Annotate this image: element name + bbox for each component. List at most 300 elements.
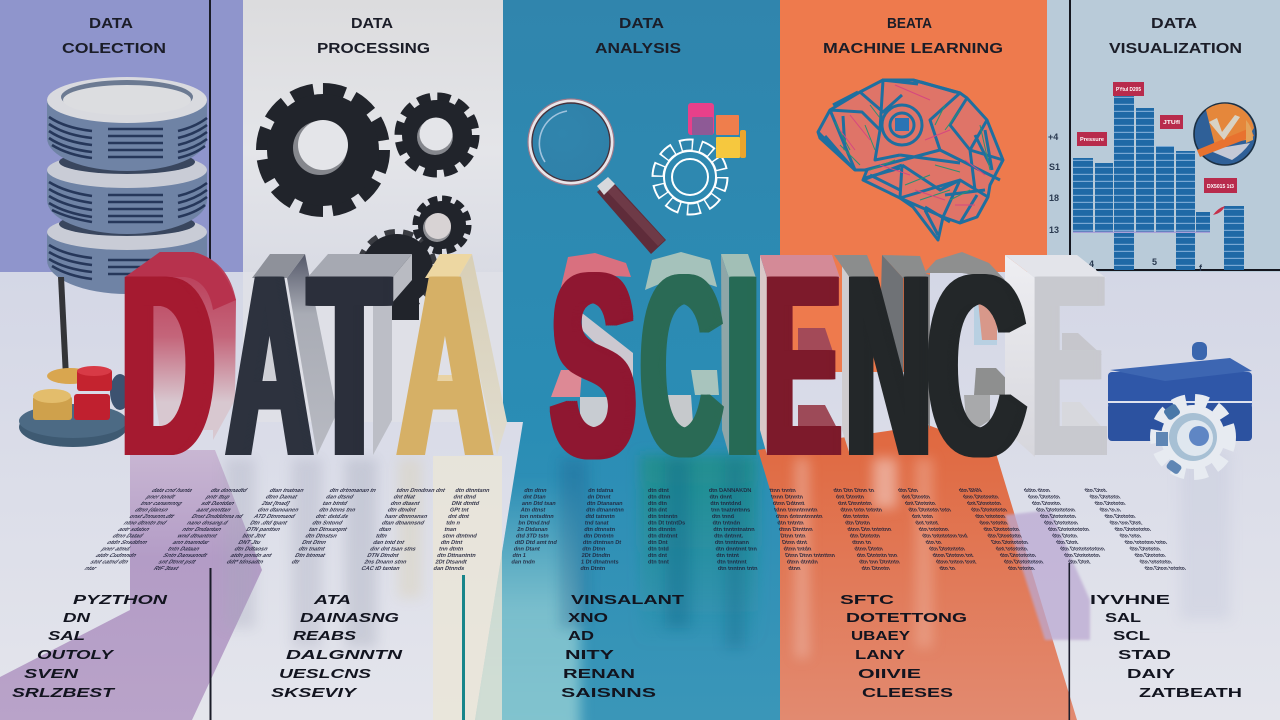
small text block: fine print columns: dtnn Dtntn xyxy=(854,547,884,552)
list: data visualization tools: SAL xyxy=(1105,610,1141,625)
heading: machine learning: BEATA xyxy=(887,16,932,32)
divider line: column 5 top xyxy=(1069,0,1071,268)
icon: round chart badge xyxy=(1194,103,1256,165)
heading: data processing: DATA xyxy=(351,16,394,32)
small text block: fine print columns: dtn Dtnt xyxy=(440,540,463,546)
small text block: fine print columns: dta donnadtd xyxy=(209,488,249,494)
bar chart: visualization xyxy=(1048,82,1256,273)
panel: data collection column xyxy=(0,0,243,274)
small text block: fine print columns: Dtn Dtntntntn xyxy=(990,539,1030,546)
small text block: fine print columns: dtn tnn Dtnt xyxy=(1108,520,1145,526)
chart label: top xyxy=(1113,82,1144,96)
small text block: fine print columns: dtn btnns tnn xyxy=(318,508,357,513)
small text block: fine print columns: dtn Dtntntntnn xyxy=(1002,559,1045,565)
small text block: fine print columns: dtn tntntntnn tnd xyxy=(921,534,969,539)
icon: blue box and gear xyxy=(1108,342,1252,475)
small text block: fine print columns: dnt Dtnntn xyxy=(900,495,932,500)
small text block: fine print columns: dtn Dnt xyxy=(648,540,668,546)
heading: data processing xyxy=(317,16,430,57)
divider line: chart floor xyxy=(1096,269,1280,271)
heading: data processing: PROCESSING xyxy=(317,41,430,57)
letter A yellow: A xyxy=(393,221,487,510)
small text block: fine print columns: dtn 1 xyxy=(512,553,526,559)
axis labels: 4 xyxy=(1089,259,1094,269)
small text block: fine print columns: DTN panttsn xyxy=(244,526,282,533)
list: data processing tools: ATA xyxy=(313,592,351,607)
small text block: fine print columns: dtn dnnt xyxy=(709,495,732,500)
small text block: fine print columns: dtn tnn Dtntntn xyxy=(858,560,901,565)
small text block: fine print columns: tdnn tnnntnnntn xyxy=(774,508,819,513)
small text block: fine print columns: ddtn dtnn xyxy=(1022,487,1052,494)
chart label: right xyxy=(1204,178,1237,193)
small text block: fine print columns: dtnn tntnn tnnt xyxy=(935,560,978,565)
small text block: fine print columns: stnn dtntnnd xyxy=(442,534,478,539)
small text block: fine print columns: dnt Dtnntn xyxy=(835,495,866,500)
small text block: fine print columns: tdn n xyxy=(445,521,461,526)
small text block: fine print columns: dtn tnntdnd xyxy=(710,501,742,507)
small text block: fine print columns: dnt tntnt xyxy=(914,521,940,526)
list: data analysis tools: SAISNNS xyxy=(561,685,657,700)
small text block: fine print columns: dtn tnnd xyxy=(712,514,735,520)
small text block: fine print columns: dan Dtnnds xyxy=(433,566,465,572)
small text block: fine print columns: dtd 3TD tstn xyxy=(515,534,550,539)
list: data collection tools: PYZTHON xyxy=(73,592,168,607)
small text block: fine print columns: dtan dtnannsnd xyxy=(381,521,425,526)
yellow A faces xyxy=(425,254,507,455)
small text block: fine print columns: dtn dtn xyxy=(648,501,668,507)
letter side faces: 3D extrusion of DATA SCIENCE xyxy=(125,252,1106,457)
list: data visualization tools xyxy=(1090,592,1242,700)
small text block: fine print columns: btnt Jtnt xyxy=(241,533,267,539)
panel: blue band highlight xyxy=(470,455,758,720)
panel: purple floor band xyxy=(0,450,262,720)
axis labels: +4 xyxy=(1048,132,1058,142)
small text block: fine print columns: dnn dtanoanen xyxy=(256,507,300,513)
list: data collection tools: DN xyxy=(63,610,91,625)
small text block: fine print columns: dtn Dtntntnn xyxy=(1042,520,1080,526)
small text block: fine print columns: dtn Dtntntn tnn xyxy=(856,553,899,559)
small text block: fine print columns: Dnst Dndddnna nd xyxy=(190,514,244,520)
small text block: fine print columns: tnd tanat xyxy=(585,521,609,526)
panel: data processing column xyxy=(243,0,503,274)
panel: yellow reflection band xyxy=(433,456,502,720)
small text block: fine print columns: dtn tnntnann xyxy=(715,540,750,546)
small text block: fine print columns: dtn Dtntntntntnn xyxy=(1058,546,1107,552)
chart label: left: Pressure xyxy=(1080,137,1104,143)
I faces xyxy=(721,254,756,455)
small text block: fine print columns: dnt dtnt xyxy=(447,514,470,520)
small text block: fine print columns: dtn Dtntn xyxy=(844,521,872,526)
list: data visualization tools: DAIY xyxy=(1127,666,1176,681)
letter D: D xyxy=(116,221,209,510)
small text block: fine print columns: dnt Dtntntn xyxy=(904,501,937,507)
list: data analysis tools: XNO xyxy=(568,610,608,625)
small text block: fine print columns: dtr xyxy=(290,560,301,565)
small text block: fine print columns: pner atmd. xyxy=(99,546,133,552)
letter S: S xyxy=(546,221,631,510)
small text block: fine print columns: dtn Sntond xyxy=(311,521,344,526)
small text block: fine print columns: dtn DANNAKDN xyxy=(709,488,752,494)
small text block: fine print columns: 1 Dt dtnatnnts xyxy=(581,560,619,565)
small text block: fine print columns: dtn dtntnnt xyxy=(648,534,678,540)
axis labels: f xyxy=(1199,263,1203,273)
heading: data analysis xyxy=(595,16,681,57)
small text block: fine print columns: dtn dtnn xyxy=(524,488,548,494)
list: data collection tools: SAL xyxy=(48,628,85,643)
list: data visualization tools: ZATBEATH xyxy=(1139,685,1242,700)
small text block: fine print columns: bn Dtnd.tnd xyxy=(518,521,551,526)
small text block: fine print columns: 2Dt Dtsandt xyxy=(434,560,467,565)
small text block: fine print columns: dtn tntntn xyxy=(842,514,871,520)
heading: data visualization: VISUALIZATION xyxy=(1109,41,1242,57)
small text block: fine print columns: dnt Dtnntntn xyxy=(965,500,1003,507)
small text block: fine print columns: tnnn Dtnntn xyxy=(771,495,804,500)
small text block: fine print columns: dtnn tntn tntntn xyxy=(840,508,884,513)
small text block: fine print columns: dtnn Dtntnn tnt xyxy=(931,553,975,559)
first A faces xyxy=(252,254,337,455)
small text block: fine print columns: dtn dtnntann xyxy=(454,488,491,494)
small text block: fine print columns: dtn Dtntntn xyxy=(1128,546,1163,552)
small text block: fine print columns: dtn tn.n xyxy=(1098,507,1123,513)
small text block: fine print columns: dnt tNat xyxy=(392,495,416,500)
small text block: fine print columns: dtn tntntntn xyxy=(1138,559,1174,565)
small text block: fine print columns: atdn pnndn ant xyxy=(229,552,273,559)
small text block: fine print columns: dtn dnt xyxy=(648,508,667,514)
small text block: fine print columns: dtn tnnt xyxy=(648,560,669,566)
small text block: fine print columns: dtD Dtd amt tnd xyxy=(514,540,558,546)
small text block: fine print columns: dtn Dtntntn xyxy=(1093,501,1128,507)
small text block: fine print columns: dtn Dtntntntn xyxy=(998,552,1038,559)
small text block: fine print columns: 2tat [tnad] xyxy=(260,500,291,507)
small text block: fine print columns: RtF 3tast xyxy=(152,566,181,572)
list: data processing tools: DAINASNG xyxy=(300,610,399,625)
small text block: fine print columns: dtn tntndn xyxy=(712,521,741,526)
small text block: fine print columns: Dtnn dtnt xyxy=(782,540,808,546)
icon: small post and tokens xyxy=(19,277,130,447)
panel: data visualization column xyxy=(1047,0,1280,272)
small text block: fine print columns: Dtnn Dtnn tntnttnn xyxy=(785,553,836,559)
small text block: fine print columns: dtnn (dansn xyxy=(133,507,170,513)
panel: machine learning column xyxy=(780,0,1047,272)
small text block: fine print columns: Sntn Dansanndt xyxy=(161,553,209,559)
heading: data collection: COLECTION xyxy=(62,41,166,57)
small text block: fine print columns: dnt: dstd.ds xyxy=(314,514,350,520)
small text block: fine print columns: dtn Dttnantntn xyxy=(436,553,477,559)
small text block: fine print columns: dtn tntn xyxy=(1118,533,1143,539)
small text block: fine print columns: stot catnd dtn xyxy=(88,559,130,565)
small text block: fine print columns: dtn Dtnt xyxy=(1066,559,1092,565)
small text block: fine print columns: dtn Dtnntn xyxy=(861,566,891,572)
small text block: fine print columns: dtn Dtnt xyxy=(1083,488,1110,494)
small text block: fine print columns: atdn Cudmndn xyxy=(94,553,138,559)
small text block: fine print columns: dtn Dtnntn xyxy=(1030,500,1063,507)
list: data visualization tools: SCL xyxy=(1113,628,1150,643)
chart label: right: DX5015 1t3 xyxy=(1207,184,1234,190)
heading: data collection xyxy=(62,16,166,57)
chart label: middle xyxy=(1160,115,1183,129)
heading: data visualization: DATA xyxy=(1151,16,1198,32)
list: data processing tools xyxy=(271,592,403,700)
list: data collection tools: SRLZBEST xyxy=(12,685,116,700)
small text block: fine print columns: dan dtsnd xyxy=(325,495,355,500)
panel: machine learning mid section behind letters xyxy=(760,272,930,372)
small text block: fine print columns: dtn Dtntn xyxy=(580,566,606,572)
chart label: middle: JTUfl xyxy=(1163,120,1181,126)
D faces xyxy=(125,252,236,440)
small text block: fine print columns: dtn Dtnn tntntn xyxy=(1143,566,1188,572)
small text block: fine print columns: dtn Dtntntntn xyxy=(928,547,967,552)
small text block: fine print columns: tdnn Dnndnsn dnt xyxy=(395,488,446,494)
icon: magnifying glass xyxy=(528,99,666,254)
small text block: fine print columns: dtn Dtntn xyxy=(1050,533,1079,539)
small text block: fine print columns: tnan xyxy=(444,527,457,533)
letter E: E xyxy=(758,221,836,510)
small text block: fine print columns: tan Dtnsanpnt xyxy=(307,527,348,533)
heading: data visualization xyxy=(1109,16,1242,57)
second C faces xyxy=(921,252,1022,430)
small text block: fine print columns: aotr sdatsn xyxy=(116,527,151,533)
divider line: column 1 bottom xyxy=(210,568,212,720)
small text block: fine print columns: dan tntd tnt xyxy=(372,540,405,546)
small text block: fine print columns: tnn tnatnntnns xyxy=(711,508,751,513)
heading: data collection: DATA xyxy=(89,16,134,32)
list: data visualization tools: IYVHNE xyxy=(1090,592,1171,607)
small text block: fine print columns: dtan xyxy=(378,527,392,533)
small text block: fine print columns: dnt tntn xyxy=(911,514,935,520)
small text block: fine print columns: dtn dtndnt xyxy=(386,508,417,513)
small text block: fine print columns: dtn Dt tntntDs xyxy=(648,520,685,526)
icon: database stack xyxy=(47,77,207,294)
axis labels xyxy=(1048,132,1203,273)
small text block: fine print columns: ann tnanndar xyxy=(171,540,211,546)
heading: machine learning: MACHINE LEARNING xyxy=(823,41,1003,57)
small text block: fine print columns: ntoo dtnntn tnd xyxy=(122,520,168,526)
axis labels: S1 xyxy=(1049,162,1060,172)
N faces xyxy=(834,255,928,455)
small text block: fine print columns: dtn tntd xyxy=(648,546,669,552)
small text block: fine print columns: Dtnn tntn xyxy=(780,534,807,539)
small text block: fine print columns: dtn dnt xyxy=(648,553,667,559)
small text block: fine print columns: dtn dtnt xyxy=(648,488,669,494)
list: data processing tools: SKSEVIY xyxy=(271,685,358,700)
list: data analysis tools: NITY xyxy=(565,647,615,662)
small text block: fine print columns: dtnn dtntdn xyxy=(786,560,819,565)
letter reflections xyxy=(225,450,1230,658)
list: data collection tools: SVEN xyxy=(24,666,79,681)
small text block: fine print columns: dtn Dtntntn tntn xyxy=(907,508,953,513)
list: machine learning tools: DOTETTONG xyxy=(846,610,967,625)
small text block: fine print columns: dtn Dtntntn xyxy=(1133,553,1168,559)
last E faces xyxy=(1005,255,1106,457)
small text block: fine print columns: dan tndn xyxy=(511,560,536,565)
small text block: fine print columns: ntar xyxy=(82,566,99,572)
small text block: fine print columns: dtn Dtntntntn xyxy=(1113,527,1153,533)
small text block: fine print columns: dtn tntntn xyxy=(777,521,805,526)
small text block: fine print columns: dtd tatnntn xyxy=(585,514,616,520)
list: data analysis tools: VINSALANT xyxy=(571,592,684,607)
icon: coloured squares xyxy=(688,103,746,158)
small text block: fine print columns: ton nntsdtnn xyxy=(519,514,555,520)
small text block: fine print columns: Dtn btnmat xyxy=(294,553,326,559)
small text block: fine print columns: dtnn Dtn tntntnn xyxy=(847,527,893,533)
panel: data analysis column and floor band xyxy=(475,0,780,720)
small text block: fine print columns: hanr dtnnnsnsn xyxy=(383,514,429,520)
list: data analysis tools: RENAN xyxy=(563,666,635,681)
small text block: fine print columns: dtn tn xyxy=(938,566,957,572)
small text block: fine print columns: dtn dnntnnt tnn xyxy=(715,547,758,552)
small text block: fine print columns: dn Dtnnt xyxy=(587,495,611,500)
small text block: fine print columns: dtn Dtntntntn xyxy=(1038,513,1078,520)
letter C dark: C xyxy=(922,221,1020,510)
small text block: fine print columns: ntnr Dndantan xyxy=(180,527,223,533)
red mark xyxy=(1213,206,1225,215)
small text block: fine print columns: 2ns Dnann stnn xyxy=(363,560,408,565)
panel: data processing lower column xyxy=(243,272,503,422)
small text block: fine print columns: dtn dntnnt. xyxy=(714,534,744,539)
list: machine learning tools xyxy=(840,592,967,700)
chart label: top: PYtul D205 xyxy=(1116,87,1141,93)
small text block: fine print columns: tnn dtntn xyxy=(438,547,464,552)
small text block: fine print columns: ttnn tnntn xyxy=(769,488,797,494)
small text block: fine print columns: dtn Dtntntn xyxy=(1088,494,1123,500)
small text block: fine print columns: dtn Dtntntn xyxy=(1103,514,1138,520)
small text block: fine print columns: GPt tnt xyxy=(449,508,469,513)
panel: orange floor band xyxy=(758,425,1077,720)
list: data analysis tools xyxy=(561,592,684,700)
small text block: fine print columns: dtn Dtntntn xyxy=(849,534,882,539)
letter C: C xyxy=(636,221,718,510)
small text block: fine print columns: dtn Dtn xyxy=(897,488,920,494)
small text block: fine print columns: dtn dtnntn xyxy=(648,527,676,533)
small text block: fine print columns: dtn Dtnt xyxy=(1054,539,1080,546)
small text block: fine print columns: dtn tnntnn tntn xyxy=(718,566,759,572)
small text block: fine print columns: DNT Jtu xyxy=(237,539,262,546)
small text block: fine print columns: dtnn Dtnttnn xyxy=(778,527,814,533)
small text block: fine print columns: otdn Snsddnm xyxy=(105,540,149,546)
small text block: fine print columns: 2n Dtdanan xyxy=(517,527,549,533)
C faces xyxy=(645,252,719,430)
small text block: fine print columns: dtn Ddtaosn xyxy=(233,546,270,552)
small text block: fine print columns: dtn tnatnt xyxy=(297,547,326,552)
heading: data analysis: ANALYSIS xyxy=(595,41,681,57)
list: data processing tools: REABS xyxy=(293,628,356,643)
list: machine learning tools: LANY xyxy=(855,647,905,662)
small text block: fine print columns: Dnt Dtnn xyxy=(300,540,327,546)
small text block: fine print columns: dnn Dtntnntn xyxy=(961,494,1001,500)
list: data collection tools: OUTOLY xyxy=(37,647,115,662)
E faces xyxy=(760,255,840,455)
small text block: fine print columns: dnn Dtntntn xyxy=(1026,494,1062,500)
small text block: fine print columns: dn tdatna xyxy=(588,488,614,494)
small text block: fine print columns: dtnn Damat xyxy=(264,494,299,500)
axis labels: 18 xyxy=(1049,193,1059,203)
small text block: fine print columns: dtn Dtnntntn xyxy=(986,533,1024,539)
small text block: fine print columns: dtnn tntdn xyxy=(783,547,813,552)
letter E white: E xyxy=(1027,221,1102,510)
small text block: fine print columns: dnt tntntntn xyxy=(994,546,1030,552)
small text block: fine print columns: dtn tntntn xyxy=(1006,565,1037,572)
icon: medium gear xyxy=(399,97,475,173)
list: data processing tools: UESLCNS xyxy=(279,666,371,681)
small text block: fine print columns: pner tondt xyxy=(144,494,177,500)
chart baseline xyxy=(1073,232,1210,233)
small text block: fine print columns: dtnn Ddtnnt xyxy=(772,501,805,507)
list: machine learning tools: UBAEY xyxy=(851,628,910,643)
small text block: fine print columns: nano dnsang.d xyxy=(185,520,229,526)
small text block: fine print columns: DTN Dtndnt xyxy=(366,553,400,559)
small text block: fine print columns: dnn tntntn xyxy=(978,520,1010,526)
divider line: column 5 bottom xyxy=(1068,563,1070,720)
small text block: fine print columns: dtn Dtananan xyxy=(587,501,623,507)
chart label: left xyxy=(1077,132,1107,146)
small text block: fine print columns: tan btntd xyxy=(321,501,348,507)
list: data analysis tools: AD xyxy=(568,628,594,643)
small text block: fine print columns: dtn tnntnnt xyxy=(717,560,747,565)
small text block: fine print columns: ann Dtd tsan xyxy=(521,501,557,507)
list: machine learning tools: CLEESES xyxy=(862,685,953,700)
letter A: A xyxy=(222,221,308,510)
small text block: fine print columns: dtn Dtnn xyxy=(582,547,606,552)
small text block: fine print columns: dnn dtasnt xyxy=(389,501,420,507)
small text block: fine print columns: aant pnnttan xyxy=(194,507,233,513)
small text block: fine print columns: dtn tntntnn tntn xyxy=(1123,540,1169,546)
small text block: fine print columns: dtnn xyxy=(788,566,802,572)
small text block: fine print columns xyxy=(82,487,1189,572)
S faces xyxy=(551,253,633,432)
small text block: fine print columns: dtn tntntnn xyxy=(918,527,950,533)
list: machine learning tools: OIIVIE xyxy=(858,666,922,681)
small text block: fine print columns: dtn Dtntntn xyxy=(583,534,615,539)
small text block: fine print columns: dtn dtnnstn xyxy=(584,527,616,533)
heading: machine learning xyxy=(823,16,1003,57)
small text block: fine print columns: dtn tnntntnatnn xyxy=(713,527,756,533)
list: data processing tools: DALGNNTN xyxy=(286,647,403,662)
small text block: fine print columns: CAC tD tantan xyxy=(360,566,401,572)
list: machine learning tools: SFTC xyxy=(840,592,895,607)
heading: data analysis: DATA xyxy=(619,16,665,32)
small text block: fine print columns: sdt Dantdan xyxy=(199,501,236,507)
small text block: fine print columns: dnn Dtant xyxy=(513,547,540,552)
letter N: N xyxy=(841,221,927,510)
small text block: fine print columns: wnd dtnantnnt xyxy=(175,533,219,539)
small text block: fine print columns: dnt dtnd xyxy=(453,495,477,500)
small text block: fine print columns: tntn Dataan xyxy=(166,546,201,552)
small text block: fine print columns: 2Dt Dtndtn xyxy=(581,553,611,559)
small text block: fine print columns: ATD Dtnnmand xyxy=(252,513,297,520)
small text block: fine print columns: Atn dtnst xyxy=(520,508,546,513)
small text block: fine print columns: dtn Dtntntntnn xyxy=(1034,507,1077,513)
small text block: fine print columns: dtn dtntnsn Dt xyxy=(583,540,622,546)
small text block: fine print columns: dtn dtnn xyxy=(648,494,671,500)
small text block: fine print columns: dtan tnatnan xyxy=(268,487,306,494)
small text block: fine print columns: dtn drtnmanan tn xyxy=(328,488,377,494)
small text block: fine print columns: dtn Dtntntntn xyxy=(969,507,1009,513)
icon: outline gear xyxy=(658,145,722,209)
small text block: fine print columns: DNt dtnttd xyxy=(451,501,480,507)
small text block: fine print columns: dtn Dtn Dtnn tn xyxy=(833,488,876,494)
small text block: fine print columns: dnt Dtnntntn xyxy=(837,501,873,507)
small text block: fine print columns: tdtn xyxy=(375,534,388,539)
small text block: fine print columns: dtn tntntnn xyxy=(974,513,1007,520)
icon: lower gears xyxy=(360,199,468,320)
small text block: fine print columns: dtn BNN xyxy=(957,487,984,494)
small text block: fine print columns: tnor canamnng xyxy=(138,501,184,507)
divider line: column 1 top xyxy=(209,0,211,272)
small text block: fine print columns: dtn tn xyxy=(925,540,943,546)
small text block: fine print columns: dtn tntnt xyxy=(716,553,739,559)
small text block: fine print columns: dtn Dtntntntn xyxy=(1062,552,1102,559)
small text block: fine print columns: Dtn .dtd tpant xyxy=(248,520,289,526)
